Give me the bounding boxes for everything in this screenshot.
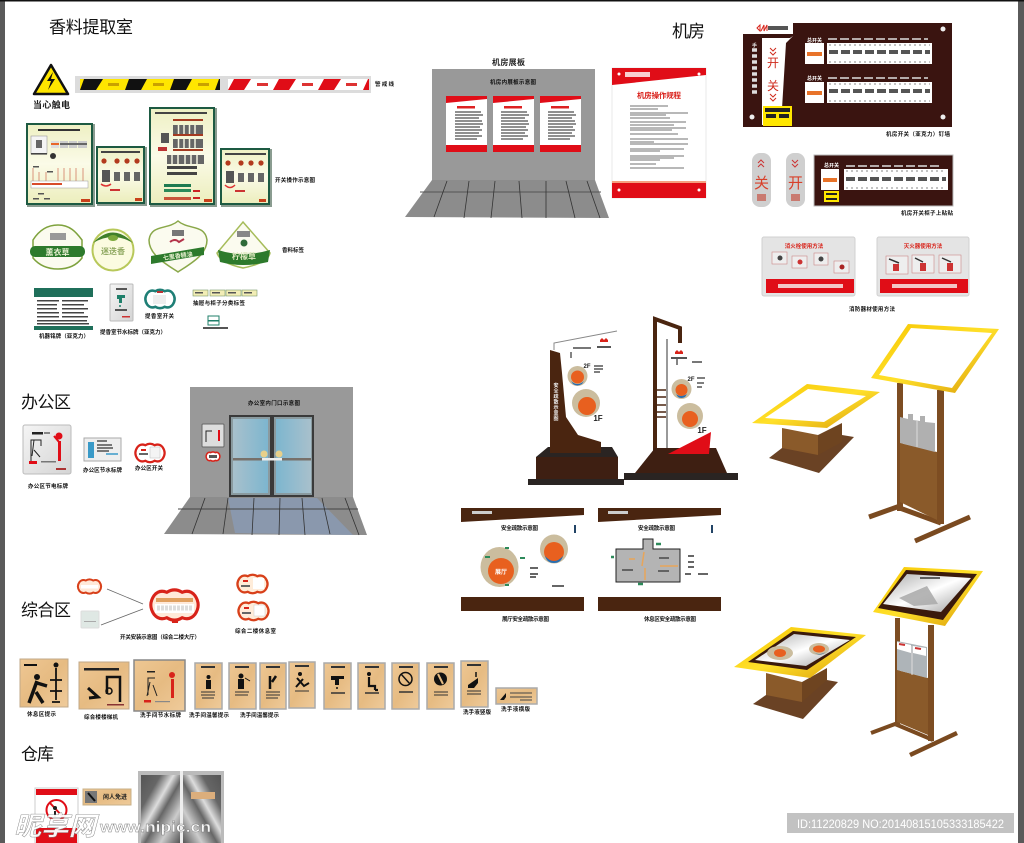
wall switch panel: 总开关 bbox=[807, 75, 822, 82]
wood sign: save water bbox=[324, 663, 351, 709]
evacuation totem 1 bbox=[528, 331, 624, 485]
floor plan panel: 展厅: 展厅 bbox=[495, 569, 507, 576]
wood sign: restroom tip 3 bbox=[260, 663, 286, 709]
heading: 香料提取室: 香料提取室 bbox=[49, 18, 133, 37]
large red poster: 机房操作规程 bbox=[612, 68, 706, 198]
machine room wall scene bbox=[405, 69, 609, 218]
label: 消防器材使用方法: 消防器材使用方法 bbox=[849, 305, 895, 313]
wall switch panel: 手 bbox=[752, 42, 757, 49]
evacuation totem 2 bbox=[624, 319, 738, 480]
office door scene bbox=[164, 387, 367, 535]
label: 机房开关（亚克力）钉墙: 机房开关（亚克力）钉墙 bbox=[886, 130, 950, 138]
wall switch panel: 关 bbox=[767, 79, 779, 93]
spice label: 薰衣草: 薰衣草 bbox=[46, 247, 70, 257]
wood sign: restroom water saving bbox=[134, 660, 185, 711]
switch panel 1 bbox=[26, 123, 95, 207]
evacuation totem 1: 意 bbox=[554, 410, 559, 416]
rest room switch 2 bbox=[238, 602, 269, 620]
wall sign on office wall bbox=[202, 424, 224, 447]
wood sign: elevator bbox=[79, 662, 129, 709]
evacuation totem 1: 图 bbox=[554, 416, 559, 422]
label: 洗手间温馨提示: 洗手间温馨提示 bbox=[189, 711, 229, 719]
icon: electric shock warning bbox=[34, 65, 68, 94]
label: 警戒线: 警戒线 bbox=[375, 80, 394, 88]
fire extinguisher instructions bbox=[877, 237, 969, 296]
wood sign: careful slip bbox=[289, 662, 315, 708]
wall switch panel: 总开关 bbox=[807, 37, 822, 44]
fire extinguisher instructions: 灭火器使用方法 bbox=[904, 242, 943, 250]
door caption: 办公室内门口示意图 bbox=[248, 399, 300, 407]
wood sign: hand soap vertical bbox=[461, 661, 488, 707]
pill sticker: 开 bbox=[786, 153, 805, 207]
label: 休息区提示: 休息区提示 bbox=[27, 710, 56, 718]
spice label: 迷迭香: 迷迭香 bbox=[101, 246, 125, 256]
pill sticker: 开: 开 bbox=[788, 175, 803, 192]
label: 开关操作示意图: 开关操作示意图 bbox=[275, 176, 315, 184]
cabinet switch sticker bbox=[814, 155, 953, 206]
poster 1 bbox=[446, 96, 487, 152]
poster 3 bbox=[540, 96, 581, 152]
floor plan panel: 休息区 bbox=[598, 508, 721, 611]
heading: 办公区: 办公区 bbox=[21, 393, 71, 412]
white wall switch bbox=[81, 611, 99, 628]
image id stamp: ID:11220829 NO:20140815105333185422 bbox=[797, 817, 1004, 831]
evacuation totem 1: 疏 bbox=[554, 393, 559, 400]
wall switch panel: 开 bbox=[767, 56, 779, 70]
wood sign: hand soap horizontal bbox=[496, 688, 537, 704]
switch panel 2 bbox=[96, 146, 147, 206]
spice label: 柠檬草: 柠檬草 bbox=[232, 251, 256, 261]
warning tape bbox=[75, 76, 371, 93]
spice label: 七里香 badge: 七里香精油 bbox=[162, 250, 193, 262]
label: 办公区开关: 办公区开关 bbox=[135, 464, 163, 472]
label: 机房开关柜子上贴贴: 机房开关柜子上贴贴 bbox=[901, 209, 953, 217]
floor plan panel: 展厅 bbox=[461, 508, 584, 611]
fire hydrant instructions bbox=[762, 237, 855, 296]
floor plan panel: 展厅: 安全疏散示意图 bbox=[501, 524, 538, 532]
label: 办公区节电标牌: 办公区节电标牌 bbox=[28, 482, 68, 490]
wood sign: restroom tip 2 bbox=[229, 663, 256, 709]
label: 综合二楼休息室: 综合二楼休息室 bbox=[235, 627, 276, 635]
evacuation totem 2: 1F bbox=[697, 426, 707, 435]
large red switch plate bbox=[151, 590, 198, 623]
heading: 综合区: 综合区 bbox=[21, 601, 71, 620]
small cabinet label bbox=[203, 316, 228, 329]
rest room switch 1 bbox=[237, 575, 268, 593]
prohibition sign bbox=[35, 788, 78, 843]
evacuation totem 1: 示 bbox=[554, 405, 559, 411]
heading: 机房: 机房 bbox=[672, 22, 705, 41]
spice label: 柠檬草 bbox=[217, 222, 270, 268]
display table with map bbox=[734, 627, 866, 719]
wall caption: 机房内展板示意图 bbox=[490, 78, 536, 86]
office power saving sign bbox=[23, 425, 71, 474]
warehouse door bbox=[138, 771, 224, 843]
wall switch on office wall bbox=[206, 452, 220, 461]
wood sign: no entry: 闲人免进 bbox=[103, 793, 127, 801]
glass double door bbox=[229, 415, 314, 497]
wood sign: no entry bbox=[83, 789, 131, 805]
evacuation totem 1: 安 bbox=[554, 382, 559, 389]
spice label: 七里香 badge bbox=[149, 221, 207, 272]
label: 休息区安全疏散示意图: 休息区安全疏散示意图 bbox=[644, 615, 696, 623]
wood sign: restroom tip 1 bbox=[195, 663, 222, 709]
office water saving sign bbox=[84, 438, 121, 461]
water saving sign bbox=[110, 284, 133, 321]
watermark: nipic bbox=[14, 811, 211, 841]
evacuation totem 1: 散 bbox=[554, 398, 559, 406]
label: 洗手液横版: 洗手液横版 bbox=[501, 705, 530, 713]
pill sticker: 关 bbox=[752, 153, 771, 207]
label: 开关安装示意图（综合二楼大厅）: 开关安装示意图（综合二楼大厅） bbox=[120, 633, 200, 641]
label: 机器铭牌（亚克力）: 机器铭牌（亚克力） bbox=[39, 332, 89, 340]
watermark: nipic: 昵享网 bbox=[14, 811, 100, 841]
pill sticker: 关: 关 bbox=[754, 175, 769, 192]
switch panel 3 bbox=[149, 107, 217, 207]
poster 2 bbox=[493, 96, 534, 152]
wood sign: rest area bbox=[20, 659, 68, 707]
label: 洗手间温馨提示: 洗手间温馨提示 bbox=[240, 711, 279, 719]
connector lines bbox=[101, 589, 143, 625]
wood sign: careful sitting bbox=[358, 663, 385, 709]
drawer labels bbox=[193, 290, 257, 296]
label: 香料标签: 香料标签 bbox=[282, 246, 304, 254]
fire hydrant instructions: 消火栓使用方法 bbox=[785, 242, 824, 250]
label: 综合楼楼梯机: 综合楼楼梯机 bbox=[84, 713, 118, 721]
machine nameplate bbox=[34, 288, 93, 331]
spice label: 迷迭香 bbox=[92, 230, 134, 270]
label: 提香室节水标牌（亚克力）: 提香室节水标牌（亚克力） bbox=[100, 328, 166, 336]
label: 洗手间节水标牌: 洗手间节水标牌 bbox=[140, 711, 181, 719]
office switch plate bbox=[135, 444, 165, 462]
evacuation totem 2: 2F bbox=[687, 377, 695, 383]
evacuation totem 1: 全 bbox=[554, 388, 559, 394]
wall switch panel bbox=[743, 23, 952, 127]
label: 展厅安全疏散示意图: 展厅安全疏散示意图 bbox=[502, 615, 549, 623]
evacuation totem 1: 2F bbox=[583, 364, 591, 370]
label: 机房展板: 机房展板 bbox=[492, 57, 525, 67]
wood sign: protect bbox=[427, 663, 454, 709]
floor plan panel: 休息区: 安全疏散示意图 bbox=[638, 524, 675, 532]
small red switch plate bbox=[78, 579, 101, 594]
lectern with map bbox=[871, 567, 983, 755]
teal switch plate bbox=[145, 290, 175, 308]
heading: 仓库: 仓库 bbox=[21, 745, 54, 764]
large red poster: 机房操作规程: 机房操作规程 bbox=[637, 90, 682, 100]
cabinet switch sticker: 总开关 bbox=[824, 162, 839, 169]
empty display table bbox=[752, 384, 880, 473]
label: 当心触电: 当心触电 bbox=[33, 99, 70, 110]
image id stamp bbox=[787, 813, 1014, 833]
wood sign: no smoking bbox=[392, 663, 419, 709]
label: 办公区节水标牌: 办公区节水标牌 bbox=[83, 466, 122, 474]
label: 抽屉与柜子分类标签: 抽屉与柜子分类标签 bbox=[193, 299, 245, 307]
evacuation totem 1: 1F bbox=[593, 414, 603, 423]
watermark: nipic: www.nipic.cn bbox=[99, 819, 211, 836]
spice label: 薰衣草 bbox=[30, 225, 85, 269]
label: 提香室开关: 提香室开关 bbox=[145, 312, 174, 320]
empty lectern stand bbox=[869, 324, 999, 541]
label: 洗手液竖版: 洗手液竖版 bbox=[463, 708, 491, 716]
switch panel 4 bbox=[220, 148, 272, 207]
